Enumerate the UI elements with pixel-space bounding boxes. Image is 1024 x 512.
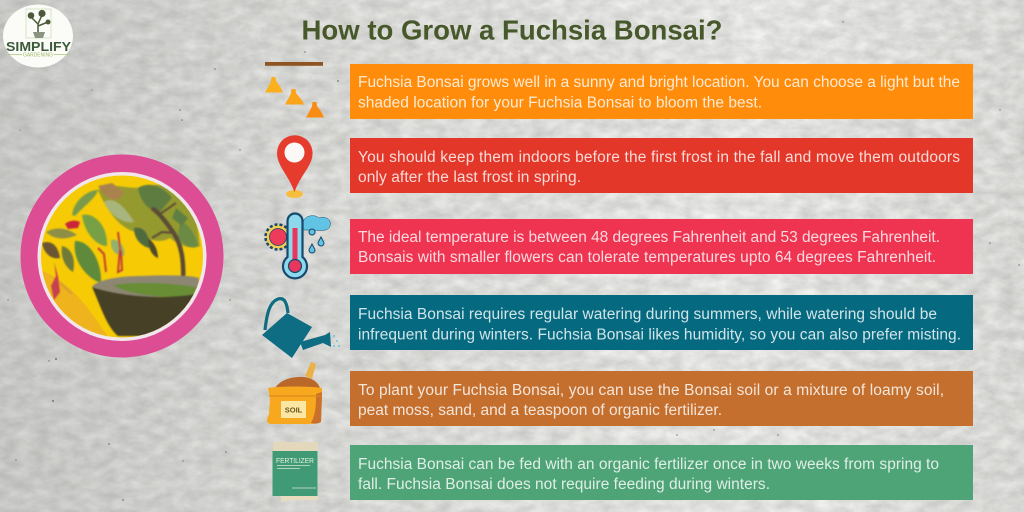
panel: light: shaded location for your Fuchsia Bonsai to bloom the best. [358, 94, 762, 112]
flowers [65, 221, 80, 229]
icon: fertilizer packet [272, 442, 318, 502]
panel: temperature [350, 219, 973, 274]
logo [3, 4, 73, 68]
icon: map pin [277, 135, 313, 198]
trunk [152, 208, 183, 282]
icon: watering can [262, 299, 340, 358]
logo: GARDENING [23, 52, 53, 58]
panel: watering [350, 295, 973, 350]
panel: soil: peat moss, sand, and a teaspoon of organic fertilizer. [358, 402, 722, 419]
pot [92, 275, 199, 297]
icon: fertilizer packet: FERTILIZER [276, 458, 314, 465]
icon: hanging lamps [265, 62, 324, 118]
panel: soil: To plant your Fuchsia Bonsai, you can use the Bonsai soil or a mixture of loamy soil, [358, 382, 944, 399]
panel: watering: infrequent during winters. Fuchsia Bonsai likes humidity, so you can also prefer misting. [358, 326, 961, 344]
bonsai photo in pink ring [20, 154, 224, 358]
icon: soil bag [267, 362, 322, 424]
panel: location: You should keep them indoors before the first frost in the fall and move them outdoors [358, 149, 960, 166]
icon: thermometer with sun and cloud [266, 214, 330, 278]
panel: fertilizer: fall. Fuchsia Bonsai does not require feeding during winters. [358, 476, 770, 493]
panel: light [350, 64, 973, 119]
panel: watering: Fuchsia Bonsai requires regular watering during summers, while watering should be [358, 306, 937, 323]
panel: soil [350, 371, 973, 426]
title: How to Grow a Fuchsia Bonsai? [302, 14, 722, 46]
panel: light: Fuchsia Bonsai grows well in a sunny and bright location. You can choose a light but the [358, 74, 960, 91]
panel: temperature: The ideal temperature is between 48 degrees Fahrenheit and 53 degrees Fahrenheit. [358, 229, 940, 246]
panel: fertilizer [350, 445, 973, 500]
logo: SIMPLIFY [6, 39, 71, 54]
icon: soil bag: SOIL [285, 406, 303, 414]
panel: location: only after the last frost in spring. [358, 169, 581, 186]
panel: temperature: Bonsais with smaller flowers can tolerate temperatures upto 64 degrees Fahrenheit. [358, 249, 936, 266]
panel: location [350, 138, 973, 193]
panel: fertilizer: Fuchsia Bonsai can be fed with an organic fertilizer once in two weeks from spring to [358, 456, 939, 473]
